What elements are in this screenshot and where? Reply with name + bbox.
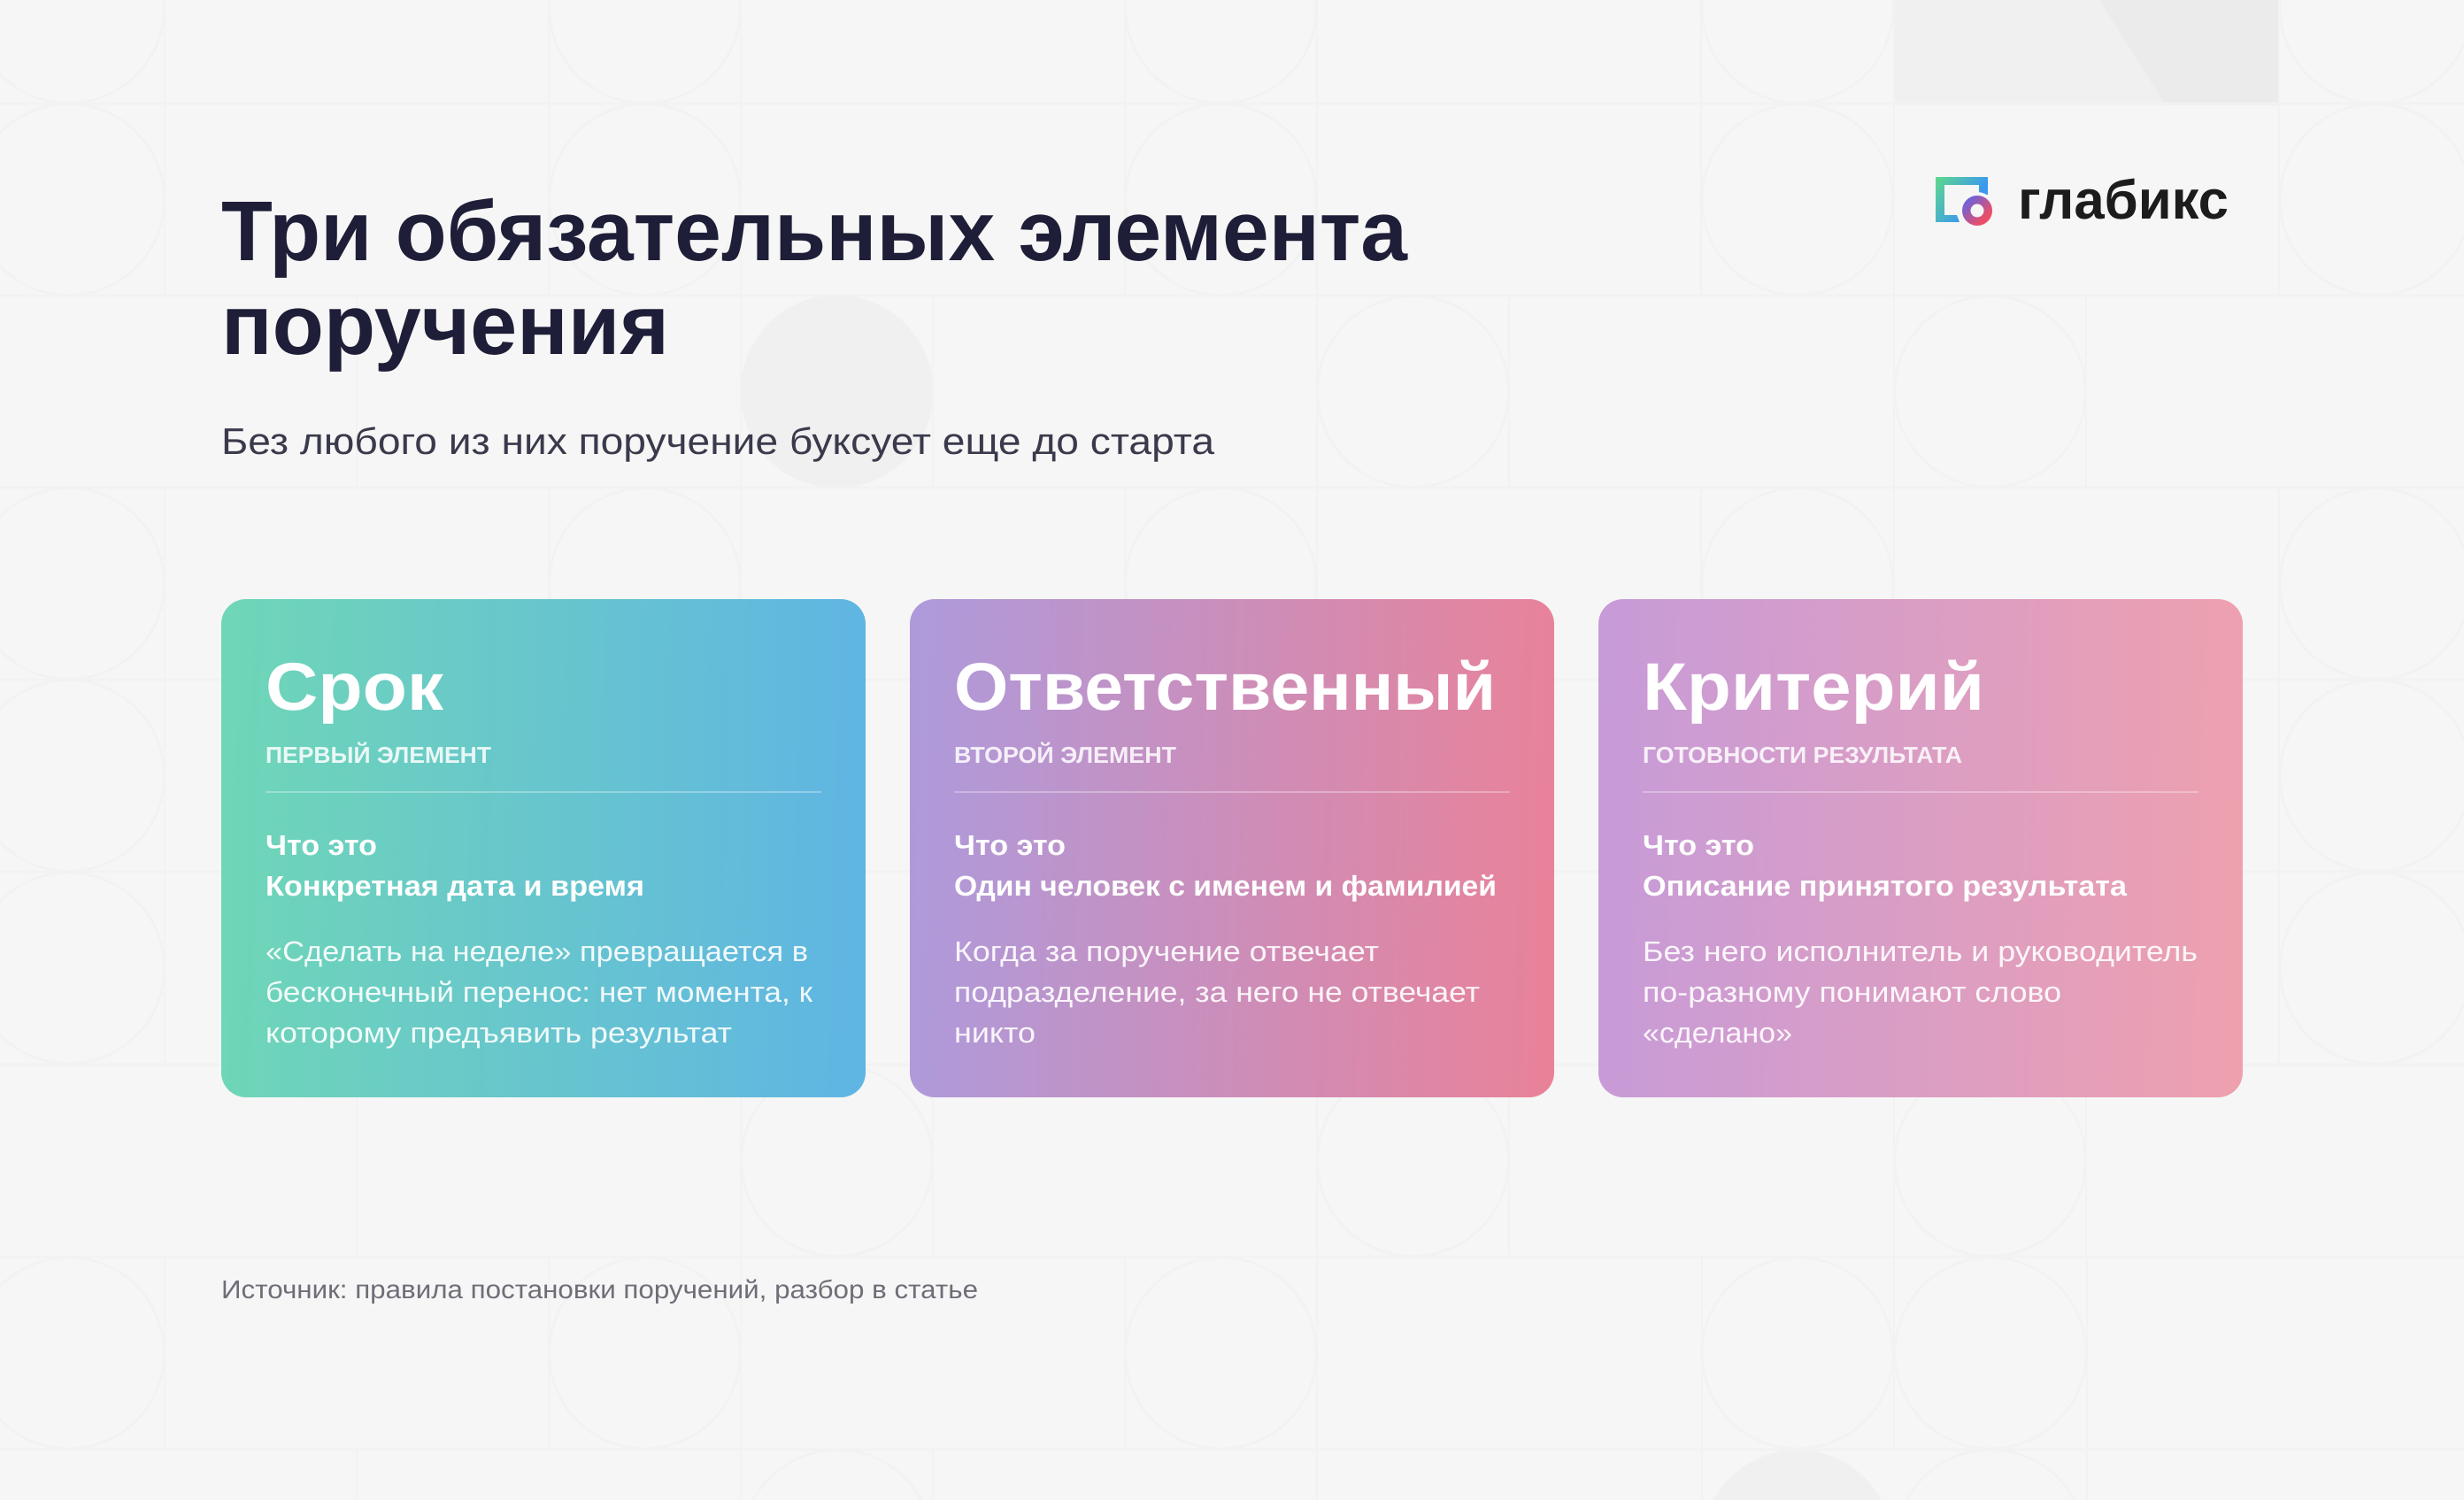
what it is [1643,829,2127,902]
card label: ВТОРОЙ ЭЛЕМЕНТ [954,742,1176,768]
source note: Источник: правила постановки поручений, разбор в статье [221,1276,978,1304]
card heading: Ответственный [954,650,1496,725]
description: по-разному понимают слово [1643,976,2061,1008]
subtitle: Без любого из них поручение буксует еще до старта [221,420,1215,462]
title: поручения [221,278,669,373]
title [221,184,1408,373]
what it is: Один человек с именем и фамилией [954,870,1497,902]
logo wordmark: глабикс [2018,170,2229,231]
what it is [266,829,644,902]
description: подразделение, за него не отвечает [954,976,1480,1008]
what it is [954,829,1497,902]
what it is: Что это [954,829,1066,861]
what it is: Что это [1643,829,1754,861]
description: которому предъявить результат [266,1017,732,1049]
description: никто [954,1017,1036,1049]
card background [221,599,866,1097]
title: Три обязательных элемента [221,184,1408,279]
logo [1936,170,2229,231]
description: Без него исполнитель и руководитель [1643,935,2198,967]
card label: ПЕРВЫЙ ЭЛЕМЕНТ [266,742,491,768]
what it is: Описание принятого результата [1643,870,2127,902]
description: Когда за поручение отвечает [954,935,1379,967]
card background [1598,599,2243,1097]
panel: Срок [221,599,866,1097]
description [954,935,1480,1049]
panel: Критерий [1598,599,2243,1097]
panel: Ответственный [910,599,1554,1097]
card background [910,599,1554,1097]
what it is: Конкретная дата и время [266,870,644,902]
description: «Сделать на неделе» превращается в [266,935,808,967]
description: «сделано» [1643,1017,1792,1049]
description [1643,935,2198,1049]
description: бесконечный перенос: нет момента, к [266,976,813,1008]
icon: logo mark [1936,177,1996,229]
card heading: Срок [266,650,444,725]
description [266,935,813,1049]
what it is: Что это [266,829,377,861]
card heading: Критерий [1643,650,1984,725]
card label: ГОТОВНОСТИ РЕЗУЛЬТАТА [1643,742,1962,768]
